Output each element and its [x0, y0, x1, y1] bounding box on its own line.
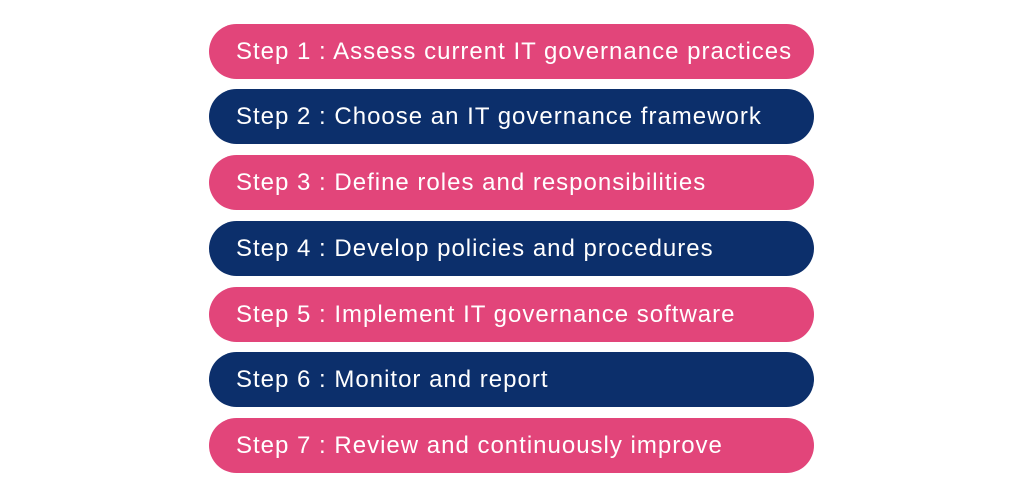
step 5 pill — [209, 287, 814, 342]
step 5 pill: Step 5 : Implement IT governance software — [236, 301, 735, 328]
step 1 pill: Step 1 : Assess current IT governance practices — [236, 38, 792, 65]
step 2 pill — [209, 89, 814, 144]
step 1 pill — [209, 24, 814, 79]
step 3 pill: Step 3 : Define roles and responsibilities — [236, 169, 706, 196]
step 7 pill — [209, 418, 814, 473]
step 4 pill: Step 4 : Develop policies and procedures — [236, 235, 714, 262]
step 4 pill — [209, 221, 814, 276]
step 2 pill: Step 2 : Choose an IT governance framework — [236, 103, 762, 130]
step 6 pill: Step 6 : Monitor and report — [236, 366, 548, 393]
step 6 pill — [209, 352, 814, 407]
step 3 pill — [209, 155, 814, 210]
step 7 pill: Step 7 : Review and continuously improve — [236, 432, 723, 459]
